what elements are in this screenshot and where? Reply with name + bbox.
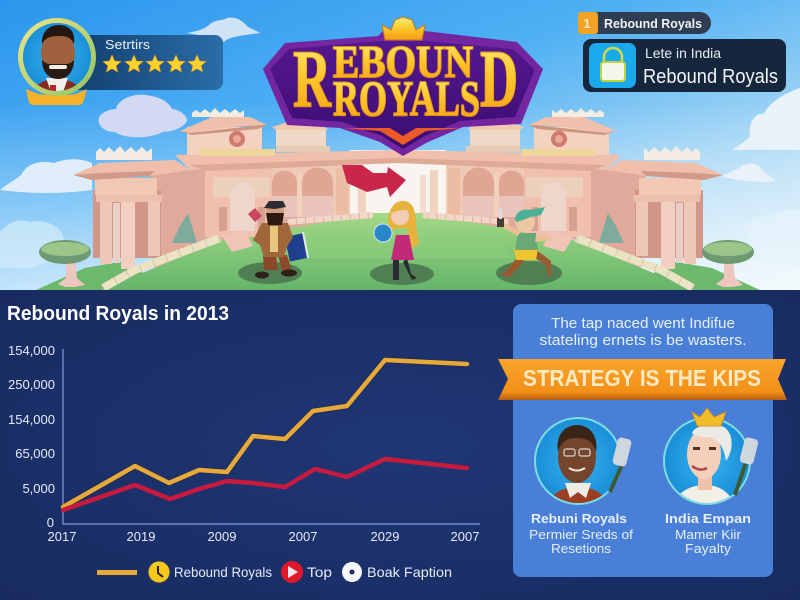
portrait: left person bbox=[534, 417, 632, 505]
ribbon banner bbox=[498, 359, 787, 400]
x axis labels: 2019 bbox=[127, 529, 155, 544]
red series bbox=[63, 459, 467, 510]
caption: right person: Mamer Kiir bbox=[675, 528, 741, 542]
arrow bbox=[342, 165, 406, 197]
chart heading: Rebound Royals in 2013 bbox=[7, 303, 229, 325]
five stars bbox=[103, 55, 206, 72]
rank pill: 1 bbox=[583, 16, 591, 31]
hero scene: palace under a blue sky bbox=[0, 0, 800, 290]
y axis labels: 65,000 bbox=[15, 446, 55, 461]
badge avatar bbox=[18, 18, 96, 105]
clouds bbox=[0, 18, 800, 268]
chart legend: Boak Faption bbox=[367, 564, 452, 580]
rank pill: Rebound Royals bbox=[604, 17, 702, 31]
character: green-capped archer bbox=[496, 207, 562, 285]
logo wordmark bbox=[293, 33, 518, 126]
microphone bbox=[610, 437, 632, 492]
caption: right person: Fayalty bbox=[685, 542, 732, 556]
tree right bbox=[702, 240, 754, 287]
logo chevron bbox=[344, 128, 462, 145]
ribbon banner: STRATEGY IS THE KIPS bbox=[523, 365, 761, 391]
clock icon bbox=[148, 561, 170, 583]
portrait: right person bbox=[663, 408, 759, 505]
character: blonde heroine bbox=[370, 201, 434, 285]
palace right wing bbox=[398, 108, 723, 288]
x axis labels bbox=[48, 529, 479, 544]
y axis labels: 250,000 bbox=[8, 377, 55, 392]
intro text: stateling ernets is be wasters. bbox=[540, 332, 746, 349]
y axis labels: 5,000 bbox=[22, 481, 55, 496]
caption: right person: India Empan bbox=[665, 511, 751, 526]
x axis labels: 2007 bbox=[289, 529, 317, 544]
gold series bbox=[63, 360, 467, 507]
tree left bbox=[39, 240, 91, 287]
disc icon bbox=[342, 562, 362, 582]
crown bbox=[692, 408, 726, 426]
app card: Rebound Royals bbox=[643, 66, 778, 88]
chart legend: Rebound Royals bbox=[174, 564, 272, 580]
navy lower panel background bbox=[0, 290, 800, 600]
player rating badge bbox=[18, 18, 223, 105]
chart legend: Top bbox=[307, 564, 332, 580]
y axis labels: 0 bbox=[47, 515, 54, 530]
caption: right person bbox=[665, 511, 751, 556]
crown bbox=[382, 17, 425, 40]
strategy panel bbox=[498, 304, 787, 577]
character: bearded merchant bbox=[238, 201, 308, 284]
x axis labels: 2007 bbox=[451, 529, 479, 544]
chart legend bbox=[97, 561, 452, 583]
caption: left person: Rebuni Royals bbox=[531, 511, 627, 526]
microphone bbox=[735, 437, 759, 495]
light central opening bbox=[350, 150, 446, 222]
logo wordmark: R bbox=[293, 33, 332, 124]
play icon bbox=[281, 561, 303, 583]
y axis labels: 154,000 bbox=[8, 343, 55, 358]
y axis labels bbox=[8, 343, 55, 530]
caption: left person bbox=[529, 511, 634, 556]
app card: Lete in India bbox=[645, 45, 721, 61]
intro text: The tap naced went Indifue bbox=[551, 315, 735, 332]
caption: left person: Permier Sreds of bbox=[529, 528, 634, 542]
palace left wing bbox=[73, 108, 398, 288]
line chart bbox=[8, 343, 480, 544]
logo wordmark: D bbox=[480, 33, 518, 124]
axes bbox=[63, 349, 480, 524]
rank pill bbox=[578, 12, 711, 34]
outer lawns and terrace bbox=[36, 213, 760, 290]
y axis labels: 154,000 bbox=[8, 412, 55, 427]
x axis labels: 2009 bbox=[208, 529, 236, 544]
app card bbox=[583, 39, 786, 92]
x axis labels: 2029 bbox=[371, 529, 399, 544]
lock icon bbox=[589, 43, 636, 88]
intro text bbox=[540, 315, 746, 349]
logo wordmark: EBOUN bbox=[333, 37, 473, 87]
logo wordmark: ROYALS bbox=[333, 70, 480, 126]
badge name: Setrtirs bbox=[105, 37, 151, 52]
game logo bbox=[263, 17, 543, 156]
x axis labels: 2017 bbox=[48, 529, 76, 544]
caption: left person: Resetions bbox=[551, 542, 611, 556]
